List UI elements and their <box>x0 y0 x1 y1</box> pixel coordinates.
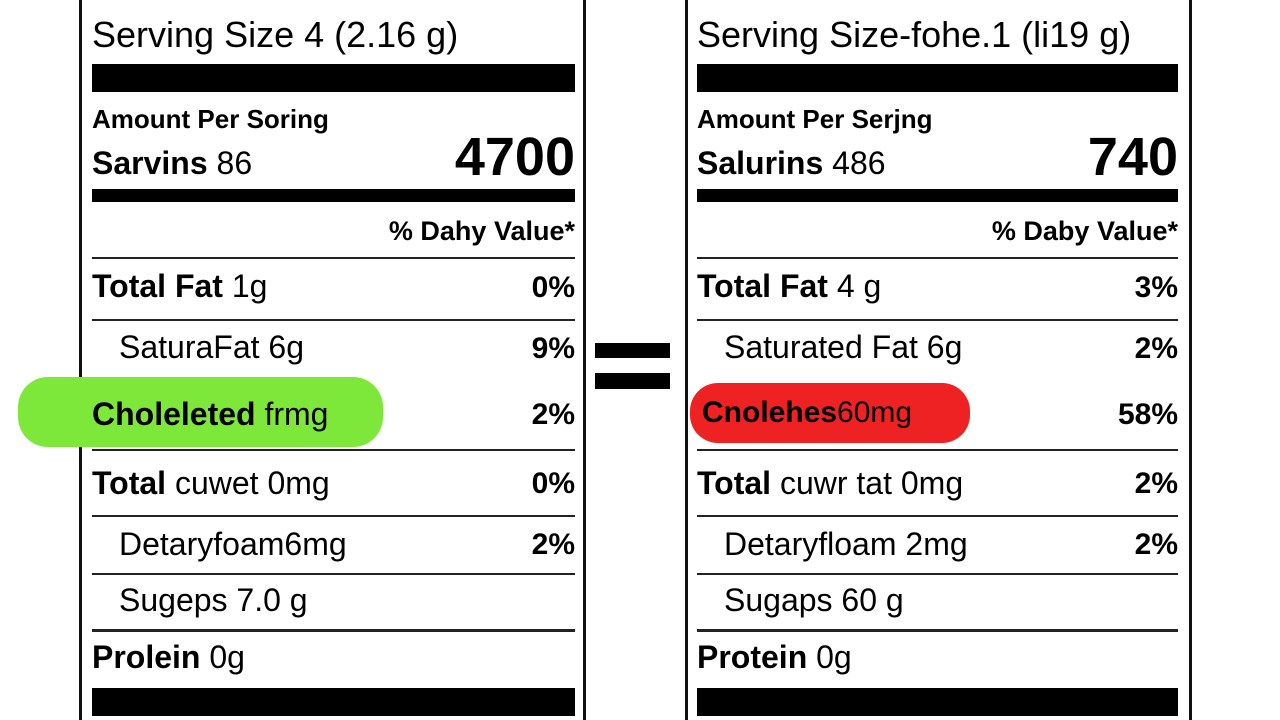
row: dietary: Detaryfloam 2mg <box>724 526 968 562</box>
icon: equals sign <box>595 343 670 389</box>
panel: right nutrition label: 2% <box>1135 467 1178 500</box>
panel: left nutrition label: 0% <box>532 467 575 500</box>
serving size heading: Serving Size 4 (2.16 g) <box>92 14 458 55</box>
row: cholesterol: Cnolehes60mg <box>702 396 912 429</box>
panel: right nutrition label <box>697 14 1178 716</box>
panel: left nutrition label: 2% <box>532 528 575 561</box>
panel: left nutrition label: 2% <box>532 398 575 431</box>
row: sugars: Sugeps 7.0 g <box>119 582 308 618</box>
row: dietary: Detaryfoam6mg <box>119 526 347 562</box>
row: protein: Prolein 0g <box>92 639 245 675</box>
panel: left nutrition label: 9% <box>532 332 575 365</box>
panel: right nutrition label: 2% <box>1135 332 1178 365</box>
serving size heading: Serving Size-fohe.1 (li19 g) <box>697 14 1131 55</box>
row: total: Total cuwet 0mg <box>92 465 330 501</box>
highlight: red cholesterol <box>690 383 970 443</box>
panel: right nutrition label: 58% <box>1118 398 1178 431</box>
row: cholesterol: Choleleted frmg <box>92 396 328 432</box>
panel: left nutrition label: % Dahy Value* <box>389 216 575 246</box>
row: saturated fat: Saturated Fat 6g <box>724 329 962 365</box>
row: total: Total cuwr tat 0mg <box>697 465 963 501</box>
panel: right nutrition label: Salurins 486 <box>697 145 886 181</box>
row: total fat: Total Fat 4 g <box>697 268 881 304</box>
calories number: 4700 <box>455 127 575 187</box>
row: saturated fat: SaturaFat 6g <box>119 329 304 365</box>
row: protein: Protein 0g <box>697 639 852 675</box>
row: total fat: Total Fat 1g <box>92 268 267 304</box>
panel: left nutrition label: Sarvins 86 <box>92 145 252 181</box>
panel: right nutrition label: 3% <box>1135 271 1178 304</box>
row: sugars: Sugaps 60 g <box>724 582 904 618</box>
panel: right nutrition label: % Daby Value* <box>992 216 1178 246</box>
amount per serving: Amount Per Soring <box>92 104 329 134</box>
panel: left nutrition label <box>92 14 575 716</box>
highlight: green cholesterol <box>18 377 383 447</box>
panel: left nutrition label: 0% <box>532 271 575 304</box>
panel: right nutrition label: 2% <box>1135 528 1178 561</box>
calories number: 740 <box>1088 127 1178 187</box>
amount per serving: Amount Per Serjng <box>697 104 932 134</box>
